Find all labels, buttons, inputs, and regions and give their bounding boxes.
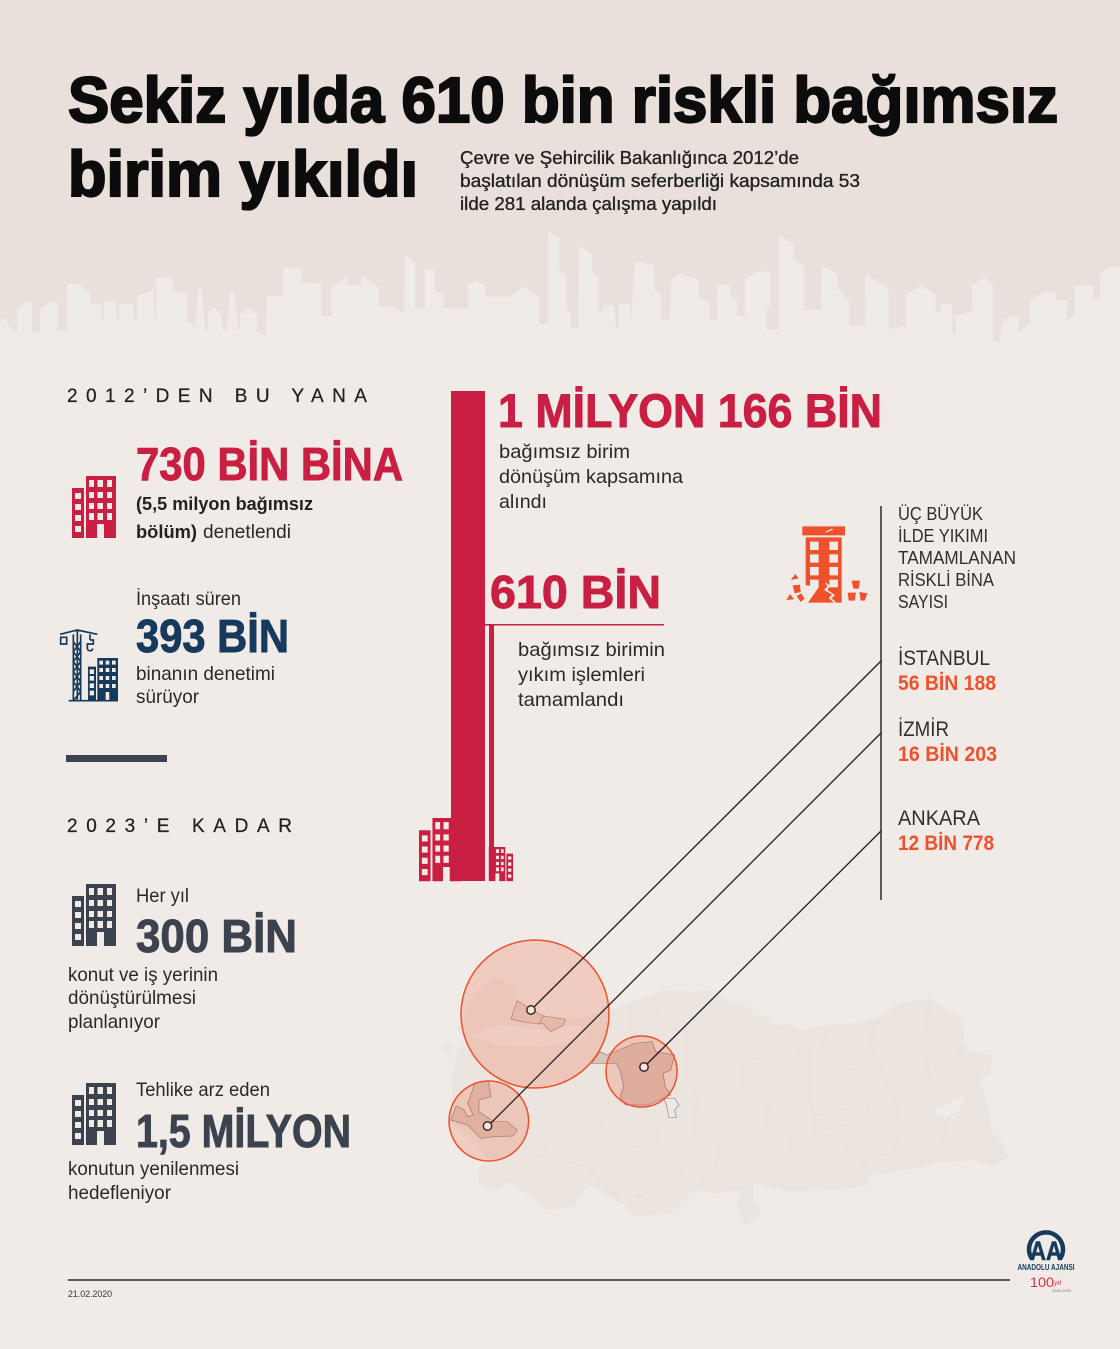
stat: 730 bin bina: denetlendi (203, 521, 291, 543)
bubble: İzmir (449, 1081, 529, 1161)
bar chart: 1 million vs 610 thousand (419, 391, 664, 881)
value: 610 bin: yıkım işlemleri (518, 664, 645, 686)
Ankara: ANKARA (898, 807, 980, 830)
logo: Anadolu Ajansı: 100 (1030, 1274, 1054, 1290)
İstanbul: İSTANBUL (898, 647, 990, 670)
value: 610 bin: bağımsız birimin (518, 639, 665, 661)
icon: dark building (72, 884, 116, 946)
stat: 300 bin: dönüştürülmesi (68, 987, 196, 1009)
Ankara (898, 807, 994, 855)
title (68, 64, 1058, 210)
value: 1 milyon 166 bin: 1 MİLYON 166 BİN (498, 384, 882, 437)
stat: 393 bin: sürüyor (136, 686, 199, 708)
stat: 1,5 milyon: hedefleniyor (68, 1182, 171, 1204)
value: 1 milyon 166 bin (498, 384, 882, 513)
İstanbul (898, 647, 996, 695)
subtitle: Çevre ve Şehircilik Bakanlığınca 2012’de (460, 147, 799, 168)
icon: collapsing building (786, 526, 867, 603)
stat: 1,5 milyon: konutun yenilenmesi (68, 1158, 239, 1180)
panel: three big cities (881, 504, 1016, 900)
emblem arc (1029, 1232, 1063, 1259)
icon: dark building (72, 1083, 116, 1145)
title: birim yıkıldı (68, 138, 418, 210)
value: 610 bin: tamamlandı (518, 689, 624, 711)
stat: 730 bin bina: 730 BİN BİNA (136, 438, 403, 490)
heading: three big cities: SAYISI (898, 592, 948, 612)
stat: 393 bin: 393 BİN (136, 610, 289, 662)
icon: large buildings at bar base (419, 818, 461, 881)
subtitle: başlatılan dönüşüm seferberliği kapsamında 53 (460, 170, 860, 191)
vertical rule (880, 506, 882, 900)
stat: 393 bin: İnşaatı süren (136, 587, 241, 610)
logo: Anadolu Ajansı: ANADOLU AJANSI (1018, 1263, 1074, 1272)
value: 1 milyon 166 bin: bağımsız birim (499, 441, 630, 463)
footer rule (68, 1279, 1010, 1281)
header band with skyline (0, 0, 1120, 360)
logo: Anadolu Ajansı (1018, 1232, 1074, 1293)
stat: 730 bin bina: bölüm) (136, 522, 197, 542)
title: Sekiz yılda 610 bin riskli bağımsız (68, 64, 1058, 136)
date: 21.02.2020 (68, 1289, 112, 1299)
heading: three big cities: TAMAMLANAN (898, 548, 1016, 568)
stat: 393 bin (60, 587, 289, 708)
logo: Anadolu Ajansı: AA (1030, 1236, 1062, 1266)
section heading: until 2023: 2023’E KADAR (67, 816, 292, 837)
Izmir outline (451, 1081, 517, 1138)
stat: 300 bin: 300 BİN (136, 910, 297, 962)
value: 1 milyon 166 bin: alındı (499, 491, 547, 513)
section heading: since 2012: 2012’DEN BU YANA (67, 386, 367, 407)
value: 1 milyon 166 bin: dönüşüm kapsamına (499, 466, 683, 488)
stat: 1,5 milyon: 1,5 MİLYON (136, 1105, 351, 1157)
stat: 730 bin bina (72, 438, 403, 543)
subtitle: ilde 281 alanda çalışma yapıldı (460, 193, 717, 214)
heading: three big cities (898, 504, 1016, 612)
stat: 730 bin bina: (5,5 milyon bağımsız (136, 494, 313, 514)
stat: 393 bin: binanın denetimi (136, 663, 275, 685)
İzmir: İZMİR (898, 718, 949, 741)
icon: crane and building (60, 630, 118, 701)
bubble: İstanbul (461, 940, 609, 1088)
stat: 300 bin: Her yıl (136, 885, 189, 907)
bar: 1 milyon 166 bin (451, 391, 485, 881)
subtitle (460, 147, 860, 214)
heading: three big cities: İLDE YIKIMI (898, 526, 988, 546)
stat: 300 bin (68, 884, 297, 1033)
stat: 300 bin: planlanıyor (68, 1011, 160, 1033)
stat: 1,5 milyon: Tehlike arz eden (136, 1079, 270, 1101)
icon: small buildings at bar base (489, 847, 513, 881)
connector lines (491, 661, 881, 1123)
stat: 300 bin: konut ve iş yerinin (68, 964, 218, 986)
İzmir (898, 718, 997, 766)
bar: 610 bin (489, 625, 494, 881)
logo: Anadolu Ajansı: yıl (1053, 1280, 1061, 1287)
logo: Anadolu Ajansı: 1920-2020 (1052, 1288, 1072, 1293)
city bubbles (449, 940, 677, 1161)
Ankara outline (592, 1042, 675, 1105)
value: 610 bin: 610 BİN (490, 566, 661, 618)
İstanbul: 56 BİN 188 (898, 672, 996, 695)
city markers (483, 1006, 648, 1130)
heading: three big cities: ÜÇ BÜYÜK (898, 504, 983, 524)
map of Turkey (441, 977, 1007, 1225)
bubble: Ankara (606, 1036, 677, 1107)
heading: three big cities: RİSKLİ BİNA (898, 570, 994, 590)
icon: red building (72, 476, 116, 538)
İzmir: 16 BİN 203 (898, 743, 997, 766)
value: 610 bin (490, 566, 665, 711)
stat: 1,5 milyon (68, 1079, 351, 1204)
Ankara: 12 BİN 778 (898, 832, 994, 855)
Istanbul and Kocaeli outline (511, 1001, 565, 1032)
